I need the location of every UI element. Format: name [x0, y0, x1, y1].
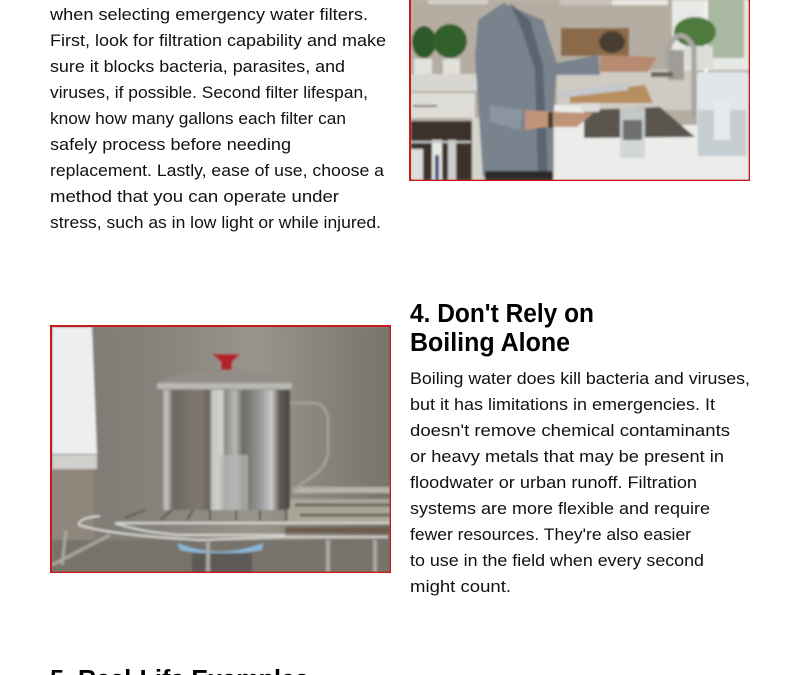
text block: filter selection advice: method that you can operate under [50, 187, 339, 206]
text block: filter selection advice: First, look for filtration capability and make [50, 31, 386, 50]
text block: filter selection advice: sure it blocks bacteria, parasites, and [50, 57, 345, 76]
heading: section 4: 4. Don't Rely on [410, 300, 594, 328]
heading: section 4 [410, 300, 594, 357]
text block: limits of boiling: Boiling water does kill bacteria and viruses, [410, 369, 750, 388]
text block: limits of boiling [410, 369, 750, 596]
text block: limits of boiling: systems are more flexible and require [410, 499, 710, 518]
text block: limits of boiling: fewer resources. They're also easier [410, 525, 691, 544]
text block: limits of boiling: to use in the field when every second [410, 551, 704, 570]
text block: limits of boiling: doesn't remove chemical contaminants [410, 421, 730, 440]
heading: section 4: Boiling Alone [410, 329, 570, 357]
text block: filter selection advice: stress, such as in low light or while injured. [50, 213, 381, 232]
photo: steel mug on camp stove [51, 326, 390, 572]
text block: filter selection advice: viruses, if possible. Second filter lifespan, [50, 83, 368, 102]
text block: filter selection advice: replacement. Lastly, ease of use, choose a [50, 161, 385, 180]
text block: limits of boiling: floodwater or urban runoff. Filtration [410, 473, 697, 492]
text block: limits of boiling: but it has limitations in emergencies. It [410, 395, 715, 414]
text block: limits of boiling: might count. [410, 577, 511, 596]
text block: filter selection advice: when selecting emergency water filters. [49, 5, 368, 24]
text block: filter selection advice: know how many gallons each filter can [50, 109, 346, 128]
text block: limits of boiling: or heavy metals that may be present in [410, 447, 724, 466]
text block: filter selection advice: safely process before needing [50, 135, 291, 154]
text block: filter selection advice [49, 5, 386, 232]
photo: person filtering water at kitchen sink [410, 0, 749, 180]
